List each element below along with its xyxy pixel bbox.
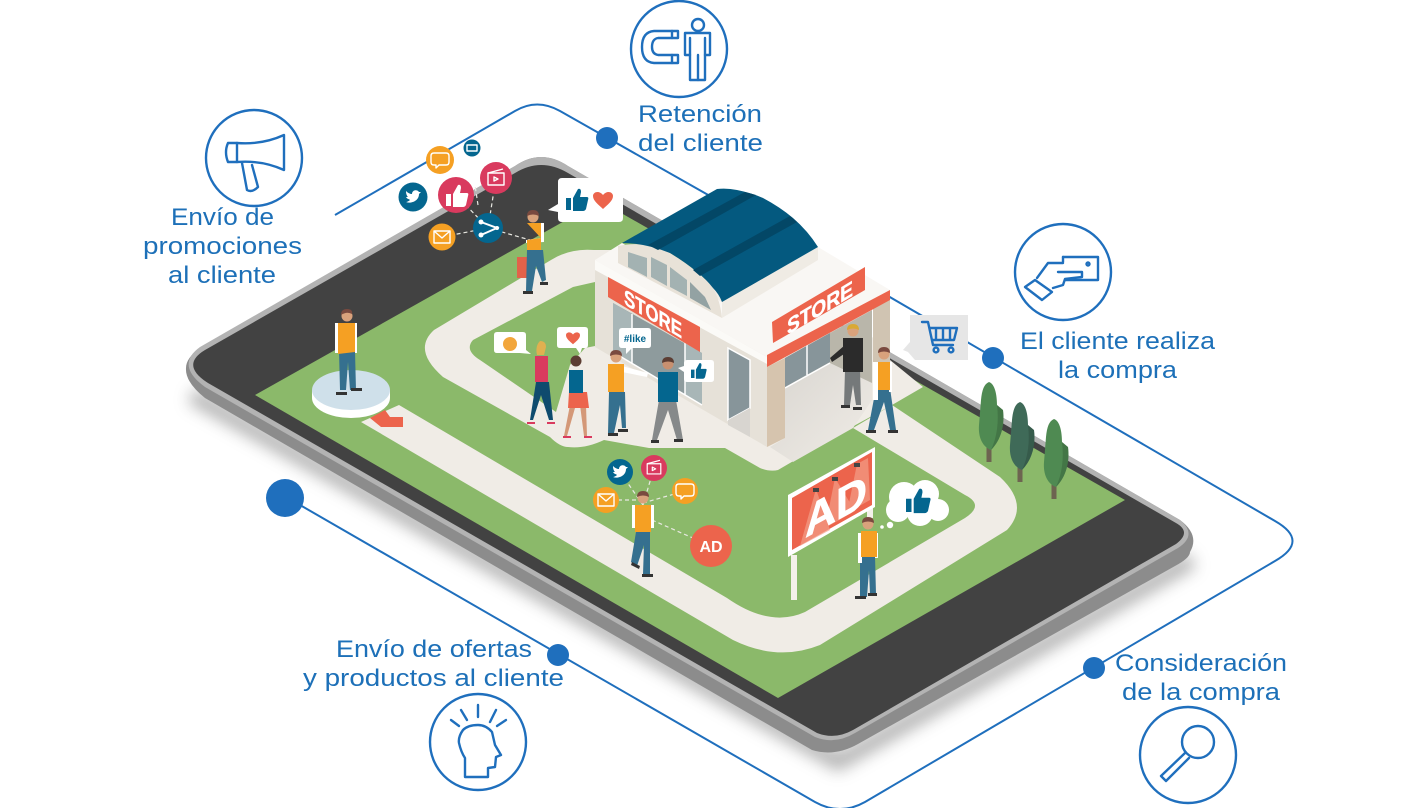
- tablet screen: [193, 165, 1184, 736]
- red band: [767, 290, 890, 367]
- tablet top rim: [189, 157, 1189, 740]
- man with vest pointing: [608, 350, 648, 436]
- dot: journey start: [266, 479, 304, 517]
- label: realiza la compra: El cliente realiza: [1020, 328, 1216, 355]
- AD icon: AD: [699, 539, 723, 556]
- label: envío de promociones: Envío de: [171, 204, 274, 231]
- dot: purchase: [982, 347, 1004, 369]
- label: envío de ofertas: y productos al cliente: [303, 665, 564, 692]
- tree 3: [1044, 419, 1068, 499]
- plaza and path: [425, 250, 923, 471]
- arch face: [618, 244, 722, 318]
- mail icon: [428, 224, 456, 250]
- twitter icon: [607, 459, 633, 485]
- store building: [595, 189, 890, 462]
- man with phone: [631, 491, 654, 577]
- front window: [613, 303, 702, 405]
- person on disc: [335, 309, 362, 395]
- video icon: [480, 162, 512, 194]
- tablet shadow: [192, 395, 1192, 762]
- tree 1: [979, 382, 1004, 462]
- journey line: [300, 104, 1292, 808]
- dot: offers: [547, 644, 569, 666]
- tablet side rim: [186, 157, 1193, 752]
- connector lines: [442, 178, 530, 240]
- outer walkway: [361, 405, 1017, 652]
- bubble: shopping cart: [903, 315, 968, 360]
- thought cloud: [880, 480, 949, 529]
- twitter icon: [398, 182, 428, 212]
- mail icon: [593, 487, 619, 513]
- inner lawn: [470, 282, 600, 412]
- red arrow: [370, 410, 403, 427]
- man with vest by door: [866, 347, 898, 433]
- label: envío de promociones: [143, 204, 302, 289]
- like icon: [438, 177, 474, 213]
- bubble: hashtag like: [619, 328, 651, 354]
- icon: hand with card: [1015, 224, 1111, 320]
- roof strips: [648, 192, 797, 276]
- label: consideración: de la compra: [1122, 679, 1281, 706]
- connector lines: [606, 468, 711, 546]
- right doorway: [785, 310, 872, 438]
- man looking at billboard: [855, 517, 878, 599]
- door threshold: [728, 408, 750, 437]
- fascia: [595, 260, 767, 364]
- icon: megaphone: [206, 110, 302, 206]
- label: consideración: [1115, 650, 1287, 706]
- door: [728, 348, 750, 420]
- label: retención: del cliente: [638, 130, 763, 157]
- walkways: [361, 250, 1017, 652]
- label: envío de ofertas: Envío de ofertas: [336, 636, 532, 663]
- floor: [770, 363, 872, 462]
- base under roof: [722, 247, 818, 318]
- speech icon: [672, 478, 698, 504]
- label: envío de promociones: promociones: [143, 233, 302, 260]
- store roof slab: [595, 243, 890, 357]
- right windows: [785, 333, 830, 388]
- bubble: hashtag like: #like: [624, 334, 647, 345]
- small mail icon: [464, 140, 480, 156]
- roof: [622, 189, 818, 302]
- billboard: AD: [805, 465, 867, 548]
- video icon: [641, 455, 667, 481]
- tan column front: [767, 358, 785, 447]
- social icons lower cluster: [593, 455, 732, 567]
- label: retención: [638, 101, 763, 157]
- man in suit: [830, 324, 863, 410]
- icon: head with ideas: [430, 694, 526, 790]
- social icons top cluster: [398, 140, 530, 250]
- label: consideración: Consideración: [1115, 650, 1287, 677]
- green park: [255, 201, 1125, 698]
- woman with pink top: [527, 341, 555, 424]
- speech icon: [426, 146, 454, 174]
- bubble: smile: [494, 332, 531, 354]
- dot: retention: [596, 127, 618, 149]
- billboard: [788, 447, 875, 600]
- left wall: [595, 262, 767, 447]
- label: realiza la compra: [1020, 328, 1216, 384]
- arch windows: [628, 252, 711, 310]
- woman with red skirt: [563, 356, 592, 438]
- icon: magnifying glass: [1140, 707, 1236, 803]
- label: retención: Retención: [638, 101, 762, 128]
- trees: [979, 382, 1068, 499]
- left store sign: STORE: [624, 285, 682, 344]
- right sign: STORE: [787, 276, 853, 341]
- bubble: heart: [557, 327, 588, 354]
- tree 2: [1010, 402, 1034, 482]
- person with bag: [517, 210, 548, 294]
- man with blue jacket: [651, 357, 683, 443]
- label: envío de promociones: al cliente: [168, 262, 276, 289]
- label: envío de ofertas: [303, 636, 564, 692]
- icon: magnet and person: [631, 1, 727, 97]
- bubble: like and heart: [548, 178, 623, 222]
- share icon: [473, 213, 503, 243]
- dot: consideration: [1083, 657, 1105, 679]
- label: realiza la compra: la compra: [1058, 357, 1178, 384]
- disc platform: [312, 370, 390, 418]
- bubble: thumb: [678, 360, 714, 382]
- tan column back: [873, 295, 890, 375]
- tablet device: [186, 157, 1193, 762]
